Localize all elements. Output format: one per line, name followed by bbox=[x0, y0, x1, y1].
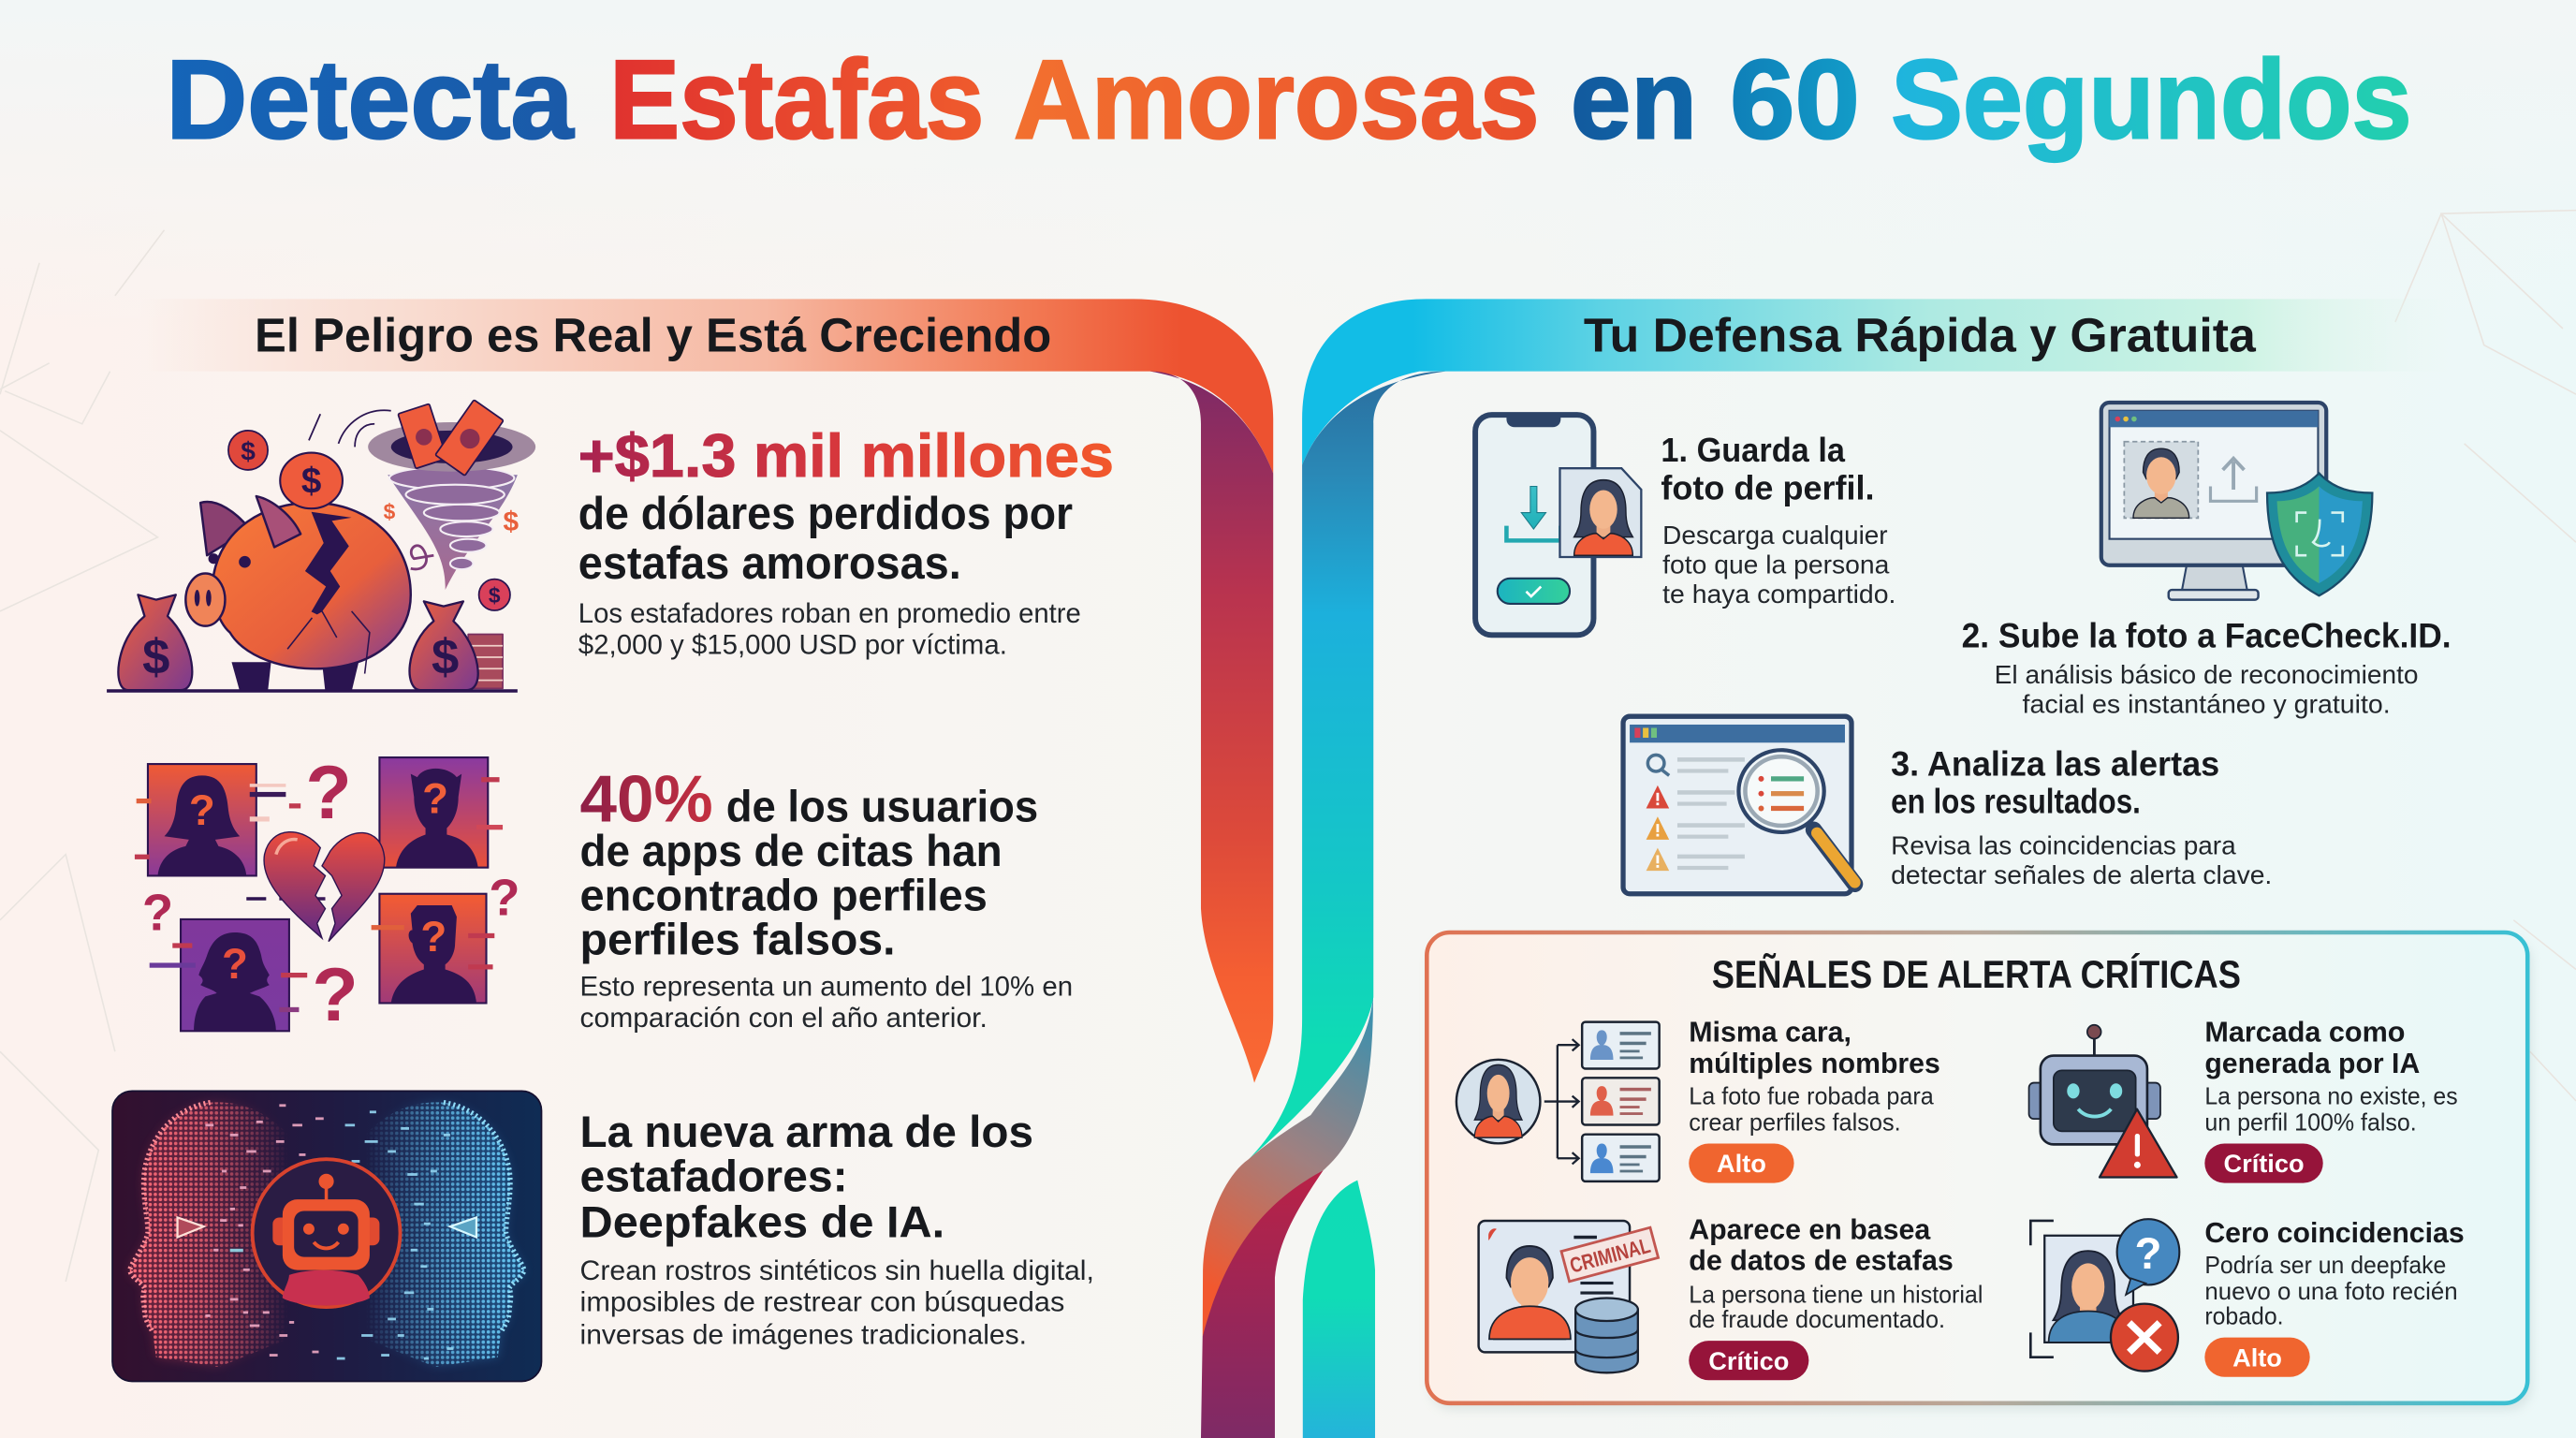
icon: broken piggy bank and money tornado: $ bbox=[504, 506, 520, 537]
text block: fake profiles statistic: comparación con el año anterior. bbox=[580, 1003, 988, 1034]
badge: alto: Alto bbox=[2232, 1343, 2282, 1372]
text block: step 1: te haya compartido. bbox=[1662, 580, 1895, 609]
text block: fake profiles statistic: encontrado perfiles bbox=[580, 871, 988, 920]
icon: same face multiple names bbox=[1456, 1022, 1660, 1181]
text block: step 3: detectar señales de alerta clave. bbox=[1891, 860, 2272, 889]
coins bbox=[280, 453, 343, 508]
icon: criminal database bbox=[1479, 1221, 1659, 1372]
icon: fake profiles and broken heart: ? bbox=[305, 751, 352, 835]
text block: fake profiles statistic: perfiles falsos. bbox=[580, 916, 896, 965]
alert text: AI generated: Marcada como bbox=[2204, 1016, 2405, 1049]
badge: critico: Crítico bbox=[2223, 1149, 2305, 1178]
text block: losses: $2,000 y $15,000 USD por víctima. bbox=[578, 630, 1007, 661]
icon: zero matches bbox=[2030, 1219, 2179, 1372]
text block: fake profiles statistic: de los usuarios bbox=[726, 783, 1038, 832]
left dotted head bbox=[130, 1102, 287, 1367]
panel heading: SEÑALES DE ALERTA CRÍTICAS bbox=[1712, 952, 2241, 996]
title: Amorosas bbox=[1014, 37, 1540, 162]
text block: step 2: facial es instantáneo y gratuito. bbox=[2023, 690, 2391, 719]
title: 60 bbox=[1730, 37, 1860, 162]
title: en bbox=[1571, 37, 1697, 162]
icon: fake profiles and broken heart: ? bbox=[489, 870, 520, 927]
alert text: same face bbox=[1689, 1016, 1940, 1136]
alert text: AI generated: generada por IA bbox=[2204, 1047, 2420, 1079]
text block: step 2: El análisis básico de reconocimiento bbox=[1995, 660, 2419, 689]
tornado bbox=[388, 475, 518, 590]
alert text: database: de fraude documentado. bbox=[1689, 1307, 1945, 1333]
text block: deepfakes: imposibles de restrear con búsquedas bbox=[580, 1287, 1064, 1318]
text block: fake profiles statistic bbox=[580, 762, 1073, 1034]
title: Estafas bbox=[609, 37, 984, 162]
crimson continuation bbox=[1201, 1170, 1324, 1438]
text block: step 2 bbox=[1962, 616, 2452, 719]
text block: losses: de dólares perdidos por bbox=[578, 489, 1073, 539]
panel: critical alert signs bbox=[1427, 932, 2532, 1410]
heading: right: Tu Defensa Rápida y Gratuita bbox=[1584, 309, 2256, 362]
title: Segundos bbox=[1891, 37, 2411, 162]
icon: broken piggy bank and money tornado: $ bbox=[489, 583, 501, 608]
icon: zero matches: ? bbox=[2134, 1229, 2161, 1279]
badge: critico bbox=[2204, 1143, 2323, 1183]
text block: step 1: 1. Guarda la bbox=[1661, 431, 1846, 469]
text block: step 3: Revisa las coincidencias para bbox=[1891, 831, 2236, 860]
frame: short hair silhouette bbox=[379, 894, 487, 1003]
icon: monitor with shield bbox=[2101, 403, 2372, 600]
alert text: same face: crear perfiles falsos. bbox=[1689, 1109, 1901, 1136]
alert text: AI generated bbox=[2204, 1016, 2458, 1136]
frame: man silhouette: ? bbox=[422, 775, 448, 823]
teal continuation bbox=[1303, 1181, 1375, 1438]
icon: AI generated robot bbox=[2029, 1025, 2177, 1177]
alert text: zero matches bbox=[2204, 1216, 2465, 1330]
alert text: database bbox=[1689, 1212, 1983, 1333]
alert text: zero matches: nuevo o una foto recién bbox=[2204, 1279, 2458, 1305]
icon: fake profiles and broken heart: ? bbox=[142, 884, 173, 941]
text block: step 1 bbox=[1661, 431, 1895, 609]
icon: broken piggy bank and money tornado: $ bbox=[241, 436, 256, 465]
right header band bbox=[1302, 299, 2448, 465]
text block: deepfakes: estafadores: bbox=[580, 1152, 848, 1201]
heading: left: El Peligro es Real y Está Creciendo bbox=[255, 309, 1051, 362]
frame: woman silhouette bbox=[148, 764, 256, 875]
text block: step 1: foto que la persona bbox=[1662, 550, 1890, 580]
alert text: same face: La foto fue robada para bbox=[1689, 1083, 1935, 1109]
icon: broken piggy bank and money tornado: $ bbox=[142, 630, 169, 685]
text block: losses: +$1.3 mil millones bbox=[578, 421, 1114, 490]
alert text: zero matches: Podría ser un deepfake bbox=[2204, 1253, 2446, 1279]
alert text: database: de datos de estafas bbox=[1689, 1244, 1954, 1277]
icon: browser results and magnifier bbox=[1623, 716, 1855, 894]
alert text: zero matches: robado. bbox=[2204, 1304, 2284, 1330]
frame: short hair silhouette: ? bbox=[420, 913, 446, 961]
icon: broken piggy bank and money tornado: $ bbox=[432, 630, 459, 685]
alert text: database: Aparece en basea bbox=[1689, 1212, 1931, 1245]
icon: deepfake AI panel bbox=[112, 1091, 541, 1381]
ribbons connecting both columns bbox=[139, 299, 2448, 1438]
crossing band bbox=[1203, 997, 1373, 1337]
text block: deepfakes bbox=[580, 1108, 1094, 1351]
text block: step 3 bbox=[1891, 744, 2272, 889]
icon: broken piggy bank and money tornado bbox=[107, 400, 535, 693]
badge: critico: Crítico bbox=[1708, 1346, 1789, 1375]
text block: fake profiles statistic: 40% bbox=[580, 762, 713, 836]
text block: step 1: foto de perfil. bbox=[1661, 469, 1875, 507]
text block: losses bbox=[578, 421, 1114, 661]
icon: phone saving profile photo bbox=[1475, 415, 1641, 635]
frame: wavy hair silhouette bbox=[181, 919, 289, 1031]
text block: deepfakes: Deepfakes de IA. bbox=[580, 1198, 944, 1248]
text block: losses: estafas amorosas. bbox=[578, 538, 961, 589]
icon: criminal database: CRIMINAL bbox=[1567, 1233, 1653, 1278]
frame: woman silhouette: ? bbox=[189, 786, 215, 834]
alert text: same face: múltiples nombres bbox=[1689, 1047, 1940, 1079]
text block: step 1: Descarga cualquier bbox=[1662, 521, 1888, 550]
left ribbon strip bbox=[1150, 372, 1273, 1083]
left header band bbox=[139, 299, 1273, 473]
text block: fake profiles statistic: Esto representa un aumento del 10% en bbox=[580, 972, 1073, 1003]
alert text: AI generated: La persona no existe, es bbox=[2204, 1083, 2458, 1109]
icon: fake profiles and broken heart: ? bbox=[312, 953, 359, 1037]
badge: critico bbox=[1689, 1341, 1808, 1380]
text block: deepfakes: La nueva arma de los bbox=[580, 1108, 1033, 1157]
alert text: same face: Misma cara, bbox=[1689, 1016, 1852, 1049]
badge: alto bbox=[1689, 1143, 1794, 1183]
text block: deepfakes: Crean rostros sintéticos sin huella digital, bbox=[580, 1255, 1094, 1286]
icon: broken piggy bank and money tornado: $ bbox=[301, 462, 321, 502]
text block: losses: Los estafadores roban en promedio entre bbox=[578, 598, 1081, 629]
title bbox=[166, 37, 2411, 162]
text block: step 3: 3. Analiza las alertas bbox=[1891, 744, 2219, 783]
right dotted head bbox=[366, 1102, 524, 1367]
right ribbon strip bbox=[1249, 372, 1445, 1160]
frame: man silhouette bbox=[379, 757, 488, 868]
frame: wavy hair silhouette: ? bbox=[222, 940, 248, 988]
icon: broken piggy bank and money tornado: $ bbox=[384, 500, 396, 524]
text block: step 3: en los resultados. bbox=[1891, 783, 2141, 821]
alert text: database: La persona tiene un historial bbox=[1689, 1283, 1983, 1309]
text block: step 2: 2. Sube la foto a FaceCheck.ID. bbox=[1962, 616, 2452, 654]
title: Detecta bbox=[166, 37, 575, 162]
text block: deepfakes: inversas de imágenes tradicionales. bbox=[580, 1320, 1027, 1351]
alert text: zero matches: Cero coincidencias bbox=[2204, 1216, 2465, 1249]
badge: alto bbox=[2204, 1338, 2310, 1377]
alert text: AI generated: un perfil 100% falso. bbox=[2204, 1109, 2417, 1136]
badge: alto: Alto bbox=[1717, 1149, 1766, 1178]
text block: fake profiles statistic: de apps de citas han bbox=[580, 827, 1003, 876]
icon: fake profiles and broken heart bbox=[135, 751, 520, 1037]
money bags bbox=[118, 594, 192, 690]
